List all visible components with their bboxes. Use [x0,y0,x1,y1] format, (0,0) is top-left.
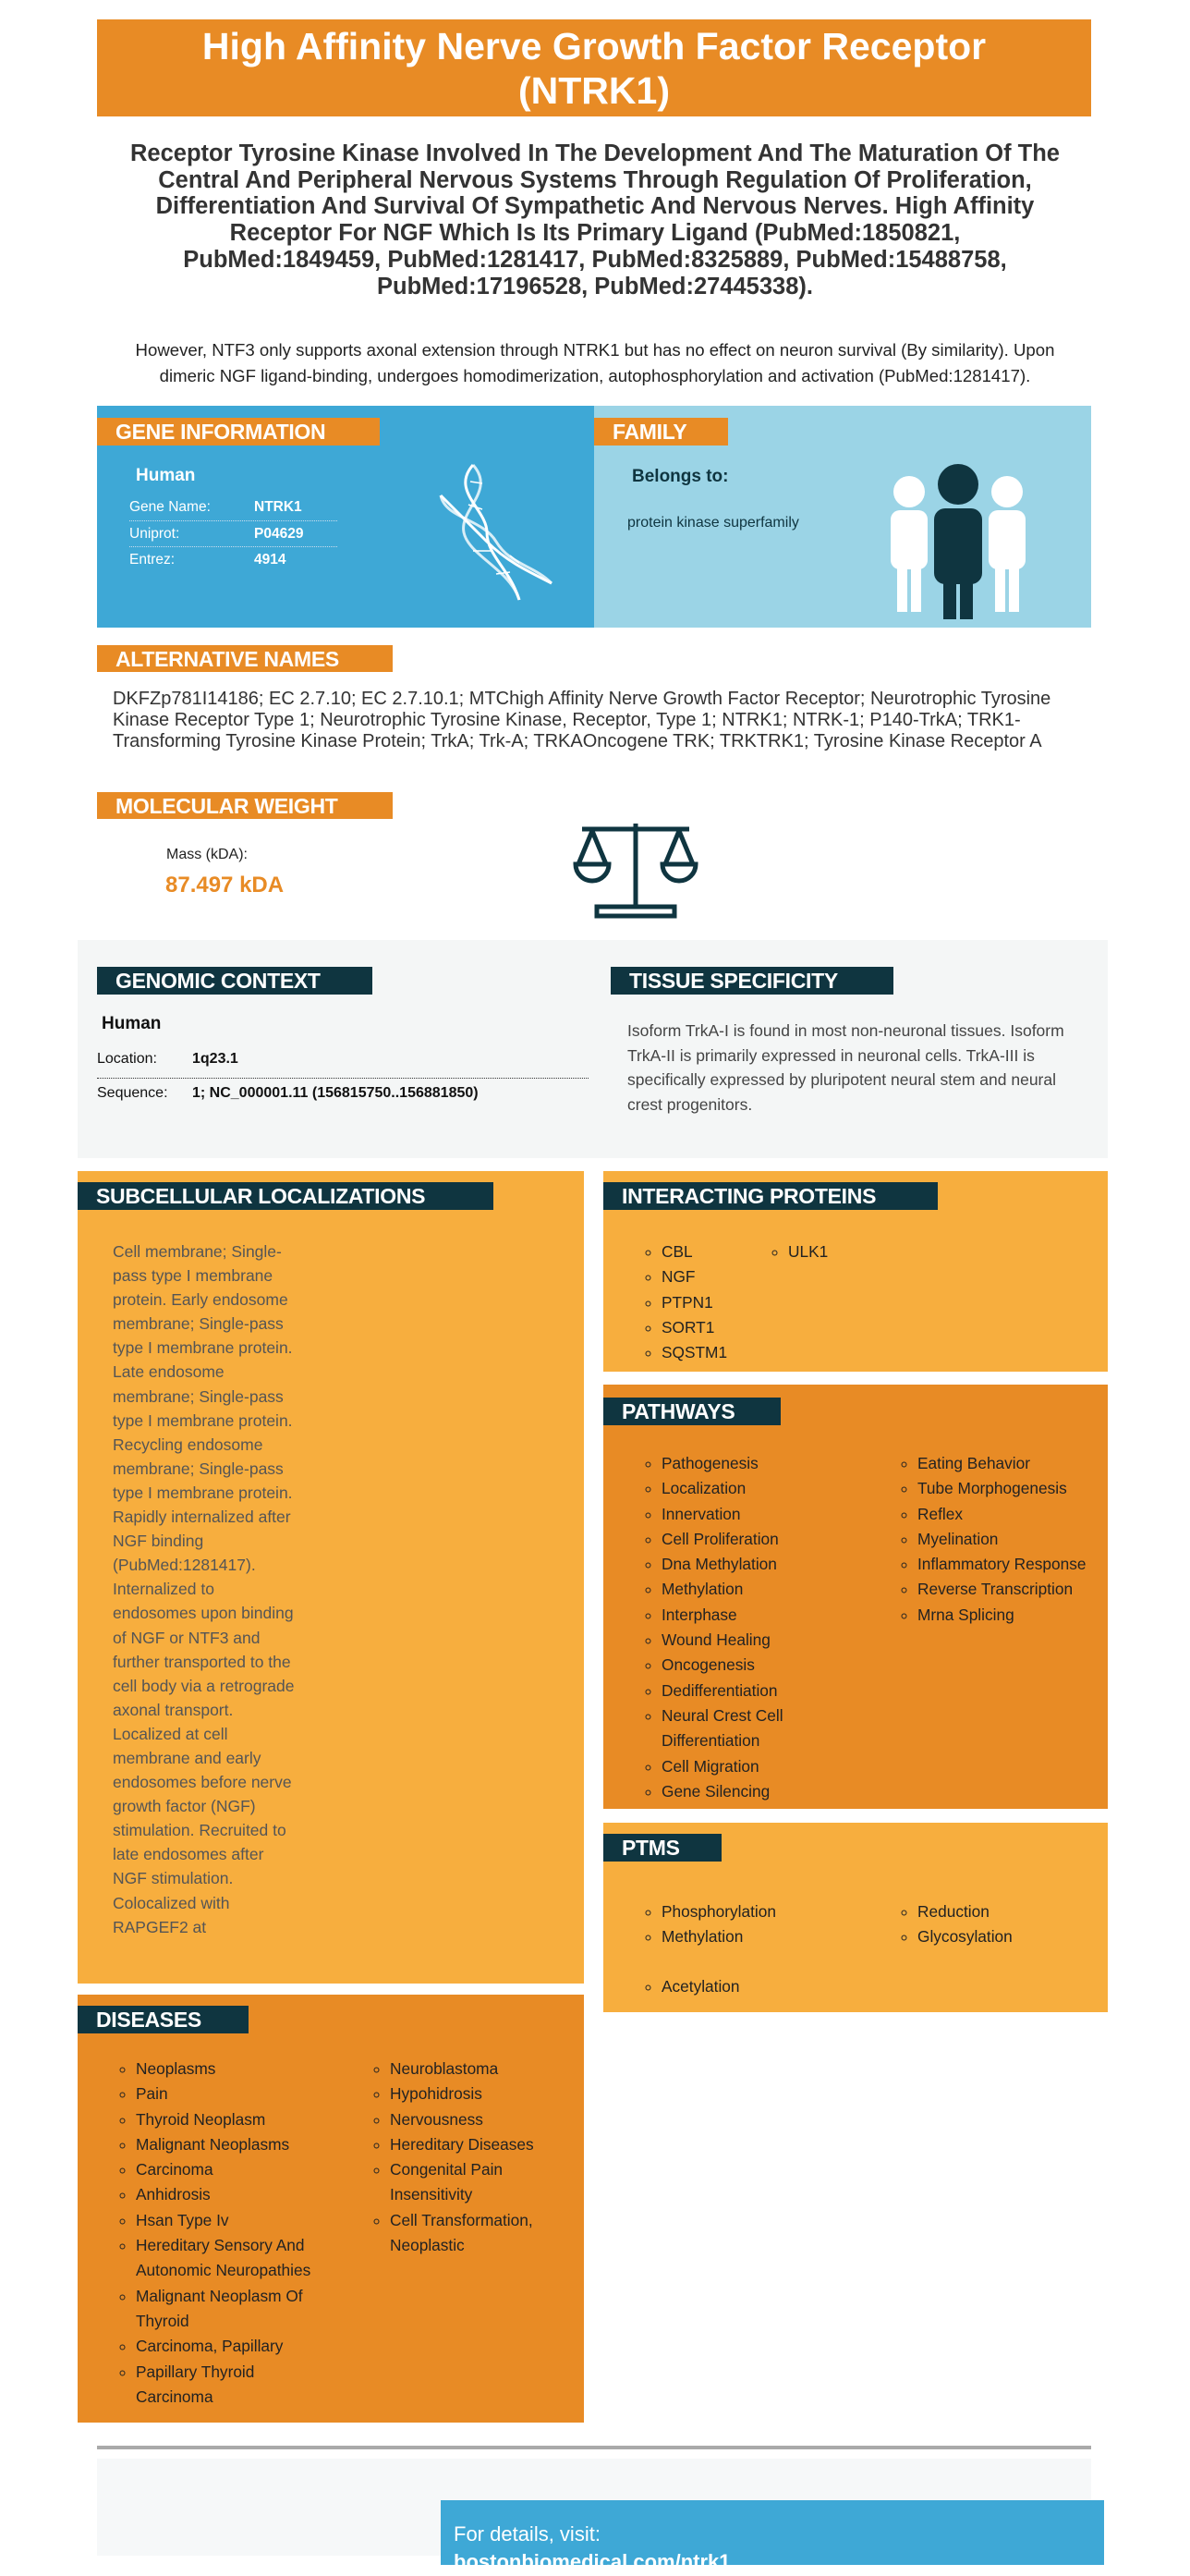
heading: gene information [97,418,380,446]
gene table: Gene Name: [129,499,211,515]
alternative names text [113,689,1050,751]
summary: Receptor Tyrosine Kinase Involved In The Development And The Maturation Of The [130,140,1060,166]
list: pathways: Innervation [662,1505,741,1523]
list: PTMs: Acetylation [662,1977,740,1996]
subcellular text: of NGF or NTF3 and [113,1629,261,1647]
text: 87.497 kDA [165,873,284,897]
heading: PTMs: PTMS [622,1836,680,1860]
list: PTMs: Methylation [662,1927,743,1946]
list: diseases: Malignant Neoplasm Of [136,2287,303,2305]
subcellular text: RAPGEF2 at [113,1918,206,1936]
footer panel [97,2459,1091,2556]
heading: pathways: PATHWAYS [622,1399,735,1423]
list: diseases: Autonomic Neuropathies [136,2261,310,2279]
subcellular text: Colocalized with [113,1894,229,1912]
heading: molecular weight: MOLECULAR WEIGHT [115,794,338,818]
list: pathways: Oncogenesis [662,1655,755,1674]
subcellular text: membrane; Single-pass [113,1459,284,1478]
heading: alternative names: ALTERNATIVE NAMES [115,647,339,671]
panel: grey context [78,940,1108,1158]
heading: molecular weight [97,792,393,819]
subcellular text: type I membrane protein. [113,1411,293,1430]
subcellular text: membrane and early [113,1749,261,1767]
gene table: Uniprot: [129,526,179,542]
gene table: Entrez: [129,552,175,568]
panel: diseases: Insensitivity [390,2185,472,2204]
list: pathways: Gene Silencing [662,1782,770,1801]
panel: subcellular localizations [78,1171,584,1984]
heading: gene information: GENE INFORMATION [115,420,325,444]
panel: diseases: Congenital Pain [390,2160,503,2179]
panel: PTMs: Reduction [917,1902,990,1921]
subcellular text: membrane; Single-pass [113,1314,284,1333]
tissue text [627,1021,1064,1113]
list: interacting [645,1242,727,1361]
summary: Central And Peripheral Nervous Systems Through Regulation Of Proliferation, [158,167,1032,193]
icon: scale [573,824,698,919]
summary: PubMed:17196528, PubMed:27445338). [377,274,813,299]
footer link box [441,2500,1104,2565]
icon: DNA [440,464,552,601]
heading: pathways [603,1398,781,1425]
icon: people [891,464,1026,619]
list: diseases: Papillary Thyroid [136,2362,254,2381]
list: diseases: Hsan Type Iv [136,2211,229,2229]
list: pathways: Dedifferentiation [662,1681,778,1700]
panel: pathways: Myelination [917,1530,998,1548]
list: diseases: Thyroid [136,2312,189,2330]
subcellular text: NGF stimulation. [113,1869,233,1887]
genomic table: 1; NC_000001.11 (156815750..156881850) [192,1085,479,1101]
list: diseases: Pain [136,2084,168,2103]
tissue text: Isoform TrkA-I is found in most non-neuronal tissues. Isoform [627,1021,1064,1040]
subcellular text: Localized at cell [113,1725,228,1743]
panel: pathways: Tube Morphogenesis [917,1479,1067,1497]
subcellular text: NGF binding [113,1532,203,1550]
genomic table: 1q23.1 [192,1051,238,1067]
list: pathways: Neural Crest Cell [662,1706,783,1725]
subcellular text: growth factor (NGF) [113,1797,256,1815]
gene table: P04629 [254,526,303,542]
heading: genomic context: GENOMIC CONTEXT [115,969,321,993]
panel: diseases: Hypohidrosis [390,2084,482,2103]
tissue text: specifically expressed by pluripotent neural stem and neural [627,1070,1056,1089]
genomic table: Location: [97,1051,157,1067]
heading: diseases: DISEASES [96,2008,201,2032]
list: diseases: Carcinoma [136,2160,213,2179]
panel: pathways: Eating Behavior [917,1454,1030,1472]
subcellular text: Cell membrane; Single- [113,1242,282,1261]
alternative names text: DKFZp781I14186; EC 2.7.10; EC 2.7.10.1; MTChigh Affinity Nerve Growth Factor Receptor; Neurotrophic Tyrosine [113,689,1050,709]
subcellular text [113,1242,294,1936]
panel: diseases: Hereditary Diseases [390,2135,534,2154]
subcellular text: pass type I membrane [113,1266,273,1285]
summary: Differentiation And Survival Of Sympathetic And Nervous Nerves. High Affinity [156,193,1034,219]
panel: pathways: Inflammatory Response [917,1555,1087,1573]
alternative names text: Transforming Tyrosine Kinase Protein; TrkA; Trk-A; TRKAOncogene TRK; TRKTRK1; Tyrosine Kinase Receptor A [113,731,1042,751]
panel: diseases: Neoplastic [390,2236,465,2254]
mass value: Mass (kDA): [166,847,248,862]
subcellular text: Recycling endosome [113,1435,262,1454]
heading: family: FAMILY [613,420,686,444]
subcellular text: endosomes upon binding [113,1604,294,1622]
summary: PubMed:1849459, PubMed:1281417, PubMed:8325889, PubMed:15488758, [183,247,1007,273]
heading: tissue specificity: TISSUE SPECIFICITY [629,969,838,993]
subcellular text: Late endosome [113,1362,225,1381]
list: diseases: Hereditary Sensory And [136,2236,305,2254]
list: pathways: Wound Healing [662,1630,771,1649]
subcellular text: further transported to the [113,1653,291,1671]
subcellular text: type I membrane protein. [113,1483,293,1502]
list: pathways [645,1454,783,1801]
subcellular text: cell body via a retrograde [113,1677,294,1695]
panel: pathways: Reverse Transcription [917,1580,1073,1598]
list: interacting: CBL [662,1242,693,1261]
panel: pathways [603,1385,1108,1809]
panel: gene information [97,406,594,628]
panel: interacting proteins: ULK1 [788,1242,828,1261]
list: pathways: Pathogenesis [662,1454,759,1472]
gene table: NTRK1 [254,499,302,515]
list: interacting: SORT1 [662,1318,714,1337]
title [97,19,1091,116]
list: PTMs: Phosphorylation [662,1902,776,1921]
list: pathways: Interphase [662,1605,737,1624]
gene table: Human [136,466,195,485]
genomic table: Sequence: [97,1085,168,1101]
gene table [129,466,337,568]
panel: diseases: Nervousness [390,2110,483,2129]
subcellular text: stimulation. Recruited to [113,1821,286,1839]
tissue text: crest progenitors. [627,1094,752,1113]
heading: diseases [78,2006,249,2033]
panel: family: protein kinase superfamily [627,515,799,531]
subcellular text: (PubMed:1281417). [113,1556,256,1574]
heading: interacting [603,1182,938,1210]
list: diseases: Anhidrosis [136,2185,211,2204]
list: pathways: Methylation [662,1580,743,1598]
list: pathways: Cell Migration [662,1757,759,1776]
list: PTMs [645,1902,776,1996]
heading: genomic context [97,967,372,995]
alternative names text: Kinase Receptor Type 1; Neurotrophic Tyrosine Kinase, Receptor, Type 1; NTRK1; NTRK-1; P140-TrkA; TRK1- [113,710,1021,730]
title: High Affinity Nerve Growth Factor Receptor [202,25,986,67]
heading: alternative names [97,645,393,672]
tissue text: TrkA-II is primarily expressed in neuronal cells. TrkA-III is [627,1046,1035,1065]
list: pathways: Differentiation [662,1731,759,1750]
list: diseases: Carcinoma, Papillary [136,2337,283,2355]
subcellular text: axonal transport. [113,1701,233,1719]
summary: Receptor For NGF Which Is Its Primary Ligand (PubMed:1850821, [230,220,960,246]
list: pathways: Localization [662,1479,746,1497]
list: diseases [120,2059,310,2406]
panel: PTMs: Glycosylation [917,1927,1013,1946]
heading: subcellular [78,1182,493,1210]
heading: family [594,418,728,446]
family text: Belongs to: [632,467,728,486]
description [136,340,1054,385]
panel: diseases [78,1995,584,2423]
panel: diseases: Cell Transformation, [390,2211,533,2229]
list: diseases: Malignant Neoplasms [136,2135,289,2154]
heading: interacting: INTERACTING PROTEINS [622,1184,876,1208]
subcellular text: type I membrane protein. [113,1338,293,1357]
title: (NTRK1) [518,69,670,112]
heading: PTMs [603,1834,722,1862]
list: pathways: Dna Methylation [662,1555,777,1573]
gene table: 4914 [254,552,285,568]
heading: subcellular: SUBCELLULAR LOCALIZATIONS [96,1184,425,1208]
subcellular text: Rapidly internalized after [113,1508,291,1526]
description: However, NTF3 only supports axonal extension through NTRK1 but has no effect on neuron survival (By similarity). Upon [136,340,1054,360]
footer link box: bostonbiomedical.com/ntrk1 [454,2550,730,2573]
list: interacting: NGF [662,1267,695,1286]
panel: pathways: Reflex [917,1505,963,1523]
panel: pathways: Mrna Splicing [917,1605,1014,1624]
subcellular text: protein. Early endosome [113,1290,288,1309]
footer link box: For details, visit: [454,2522,601,2545]
subcellular text: late endosomes after [113,1845,263,1863]
list: diseases: Carcinoma [136,2387,213,2406]
genomic table [97,1014,589,1101]
genomic table: Human [102,1014,161,1033]
panel: family [594,406,1091,628]
subcellular text: membrane; Single-pass [113,1387,284,1406]
panel: PTMs [603,1823,1108,2012]
list: diseases: Thyroid Neoplasm [136,2110,265,2129]
list: interacting: SQSTM1 [662,1343,727,1361]
description: dimeric NGF ligand-binding, undergoes homodimerization, autophosphorylation and activation (PubMed:1281417). [160,366,1030,385]
heading: tissue specificity [611,967,893,995]
subcellular text: Internalized to [113,1580,214,1598]
list: interacting: PTPN1 [662,1293,713,1312]
panel: interacting proteins [603,1171,1108,1372]
summary [130,140,1060,299]
panel: diseases: Neuroblastoma [390,2059,498,2078]
subcellular text: endosomes before nerve [113,1773,292,1791]
list: diseases: Neoplasms [136,2059,215,2078]
list: pathways: Cell Proliferation [662,1530,779,1548]
